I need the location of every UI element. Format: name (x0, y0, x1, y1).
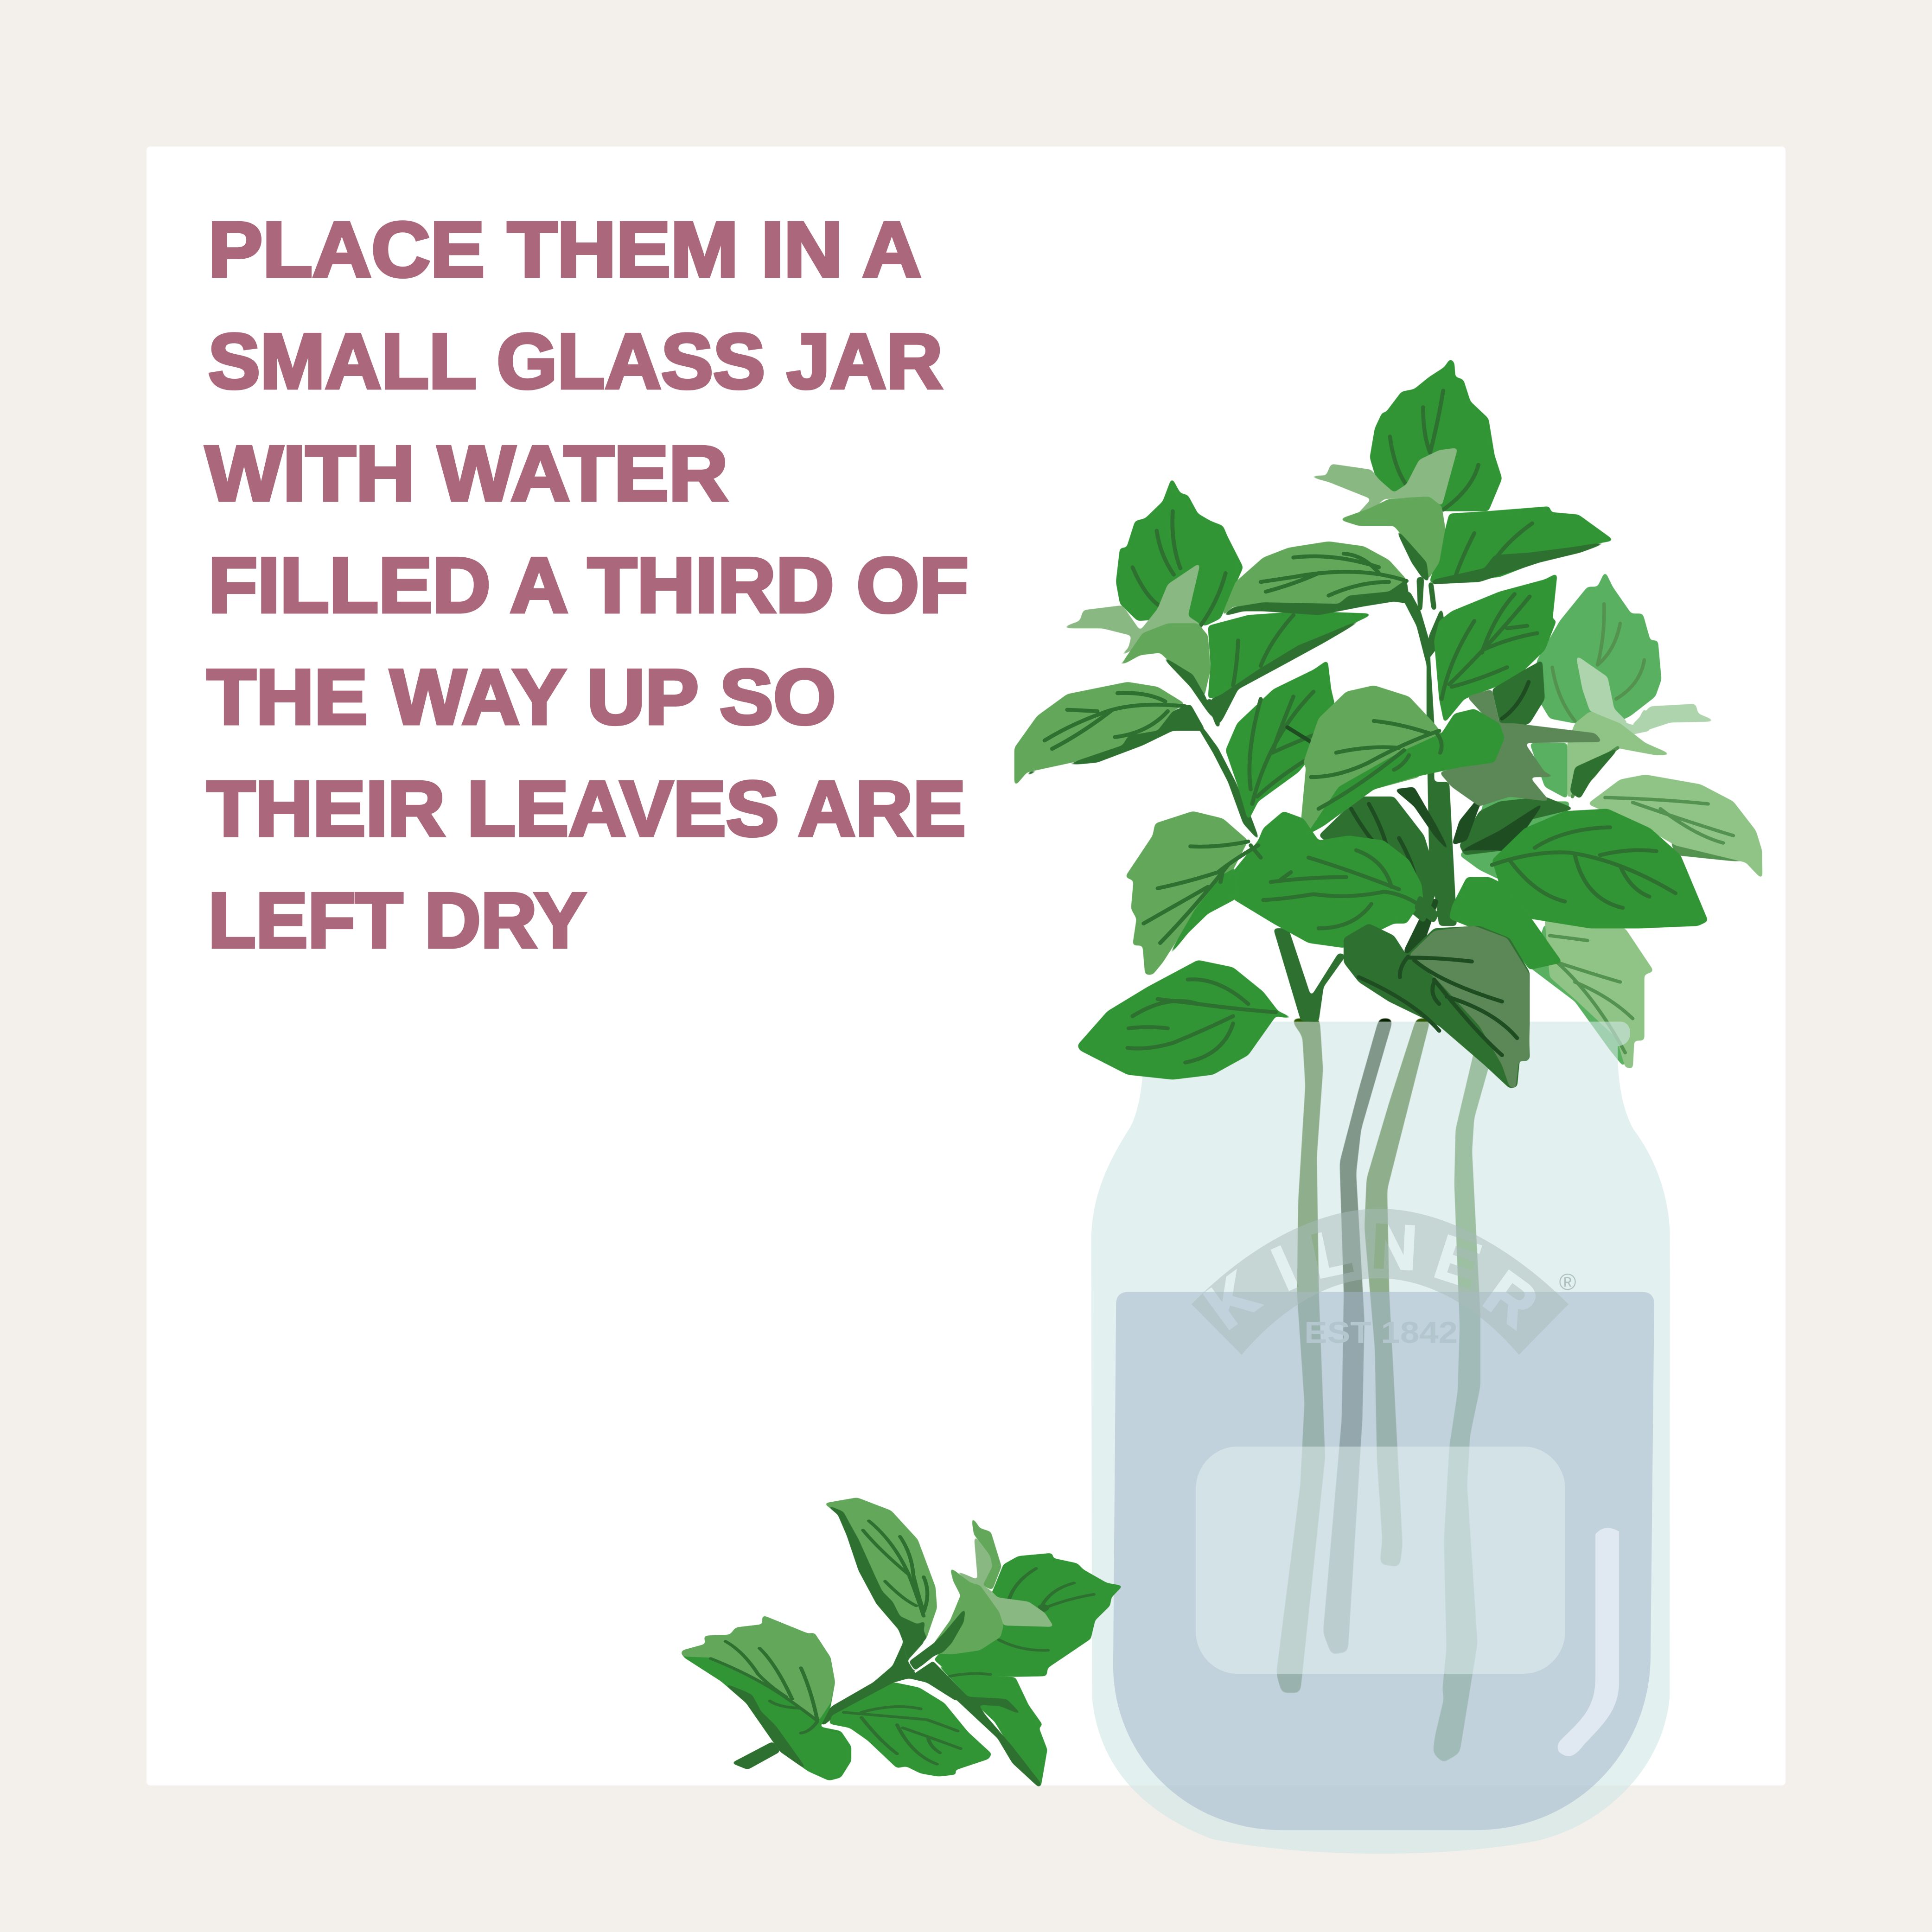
left lower light leaf (1125, 811, 1261, 975)
top pale fold (1305, 448, 1458, 523)
main stems (1186, 577, 1457, 1022)
left light fold (1103, 624, 1218, 726)
left cluster lower leaf (1208, 611, 1374, 726)
Kilner logo: ® (1559, 1269, 1576, 1295)
sprig right leaf (909, 1553, 1122, 1789)
top light fold (1339, 497, 1445, 583)
mid left upright leaf (1225, 660, 1335, 821)
sprig upper light piece (971, 1515, 1001, 1590)
right big leaf (1492, 809, 1708, 928)
jar label panel (1196, 1447, 1565, 1674)
sprig white slit (914, 1657, 935, 1673)
top right leaf (1429, 506, 1614, 584)
far left light leaf (1014, 682, 1205, 787)
heading text: THEIR LEAVES ARE (207, 765, 966, 852)
bottom left leaf (1077, 960, 1299, 1079)
heading text: FILLED A THIRD OF (208, 542, 969, 629)
heading text: THE WAY UP SO (207, 653, 836, 740)
central dark leaf cluster (1319, 660, 1620, 924)
water (1113, 1292, 1654, 1830)
stems in the jar (1276, 1018, 1493, 1763)
lower right green leaf (1449, 877, 1562, 970)
heading text (205, 206, 969, 964)
center left big leaf (1231, 811, 1439, 948)
sprig lower leaf (829, 1683, 992, 1777)
heading text: LEFT DRY (208, 877, 586, 964)
top leaf (1370, 358, 1502, 511)
sprig pale fold (952, 1534, 1054, 1627)
sprig left leaf (681, 1615, 851, 1781)
center light and green leaf (1300, 685, 1505, 835)
Kilner logo: EST 1842 (1304, 1315, 1458, 1349)
loose basil sprig (681, 1498, 1122, 1789)
white panel (147, 147, 1785, 1785)
left cluster top leaf (1116, 478, 1243, 626)
bottom center leaf (1344, 924, 1530, 1088)
horizontal light leaf (1220, 542, 1410, 618)
glass highlight (1558, 1528, 1619, 1756)
heading text: SMALL GLASS JAR (208, 318, 943, 405)
basil plant in jar (1014, 358, 1708, 1088)
right center leaf (1434, 573, 1557, 723)
sprig top leaf (824, 1498, 937, 1661)
jar body (1091, 1022, 1670, 1854)
Kilner logo (1192, 1209, 1576, 1355)
heading text: WITH WATER (205, 430, 728, 517)
glass jar (1091, 1022, 1670, 1854)
heading text: PLACE THEM IN A (208, 206, 921, 293)
back leaves behind the jar (1459, 571, 1762, 1069)
sprig light fold (909, 1559, 1003, 1671)
sprig stem (732, 1741, 780, 1770)
left pale fold (1060, 562, 1203, 661)
